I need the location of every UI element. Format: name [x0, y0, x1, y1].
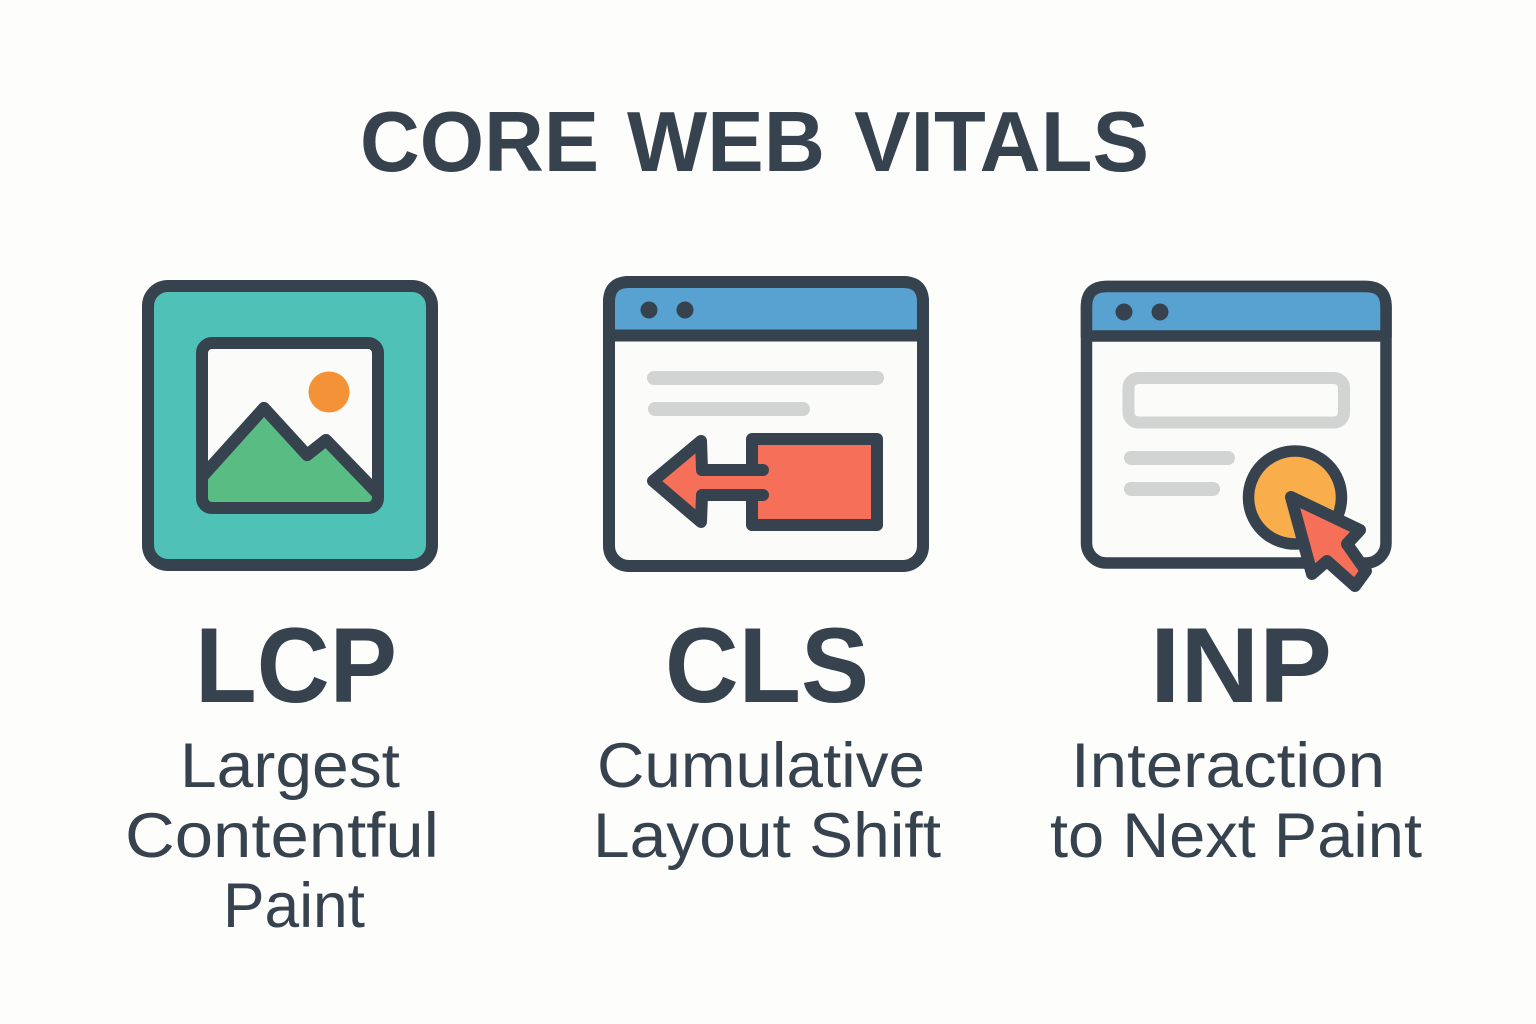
title: CORE — [360, 95, 599, 190]
description: LCP: Contentful — [125, 801, 439, 871]
icon: CLS layout shift — [609, 282, 923, 566]
icon: INP interaction — [1086, 286, 1386, 586]
description: INP — [1050, 731, 1423, 871]
heading: LCP: LCP — [195, 605, 397, 725]
description: INP: to Next Paint — [1050, 801, 1423, 871]
description: CLS: Layout Shift — [593, 801, 942, 871]
description: LCP: Largest — [180, 731, 401, 801]
description: INP: Interaction — [1071, 731, 1385, 801]
title: VITALS — [854, 95, 1149, 190]
title: WEB — [627, 95, 825, 190]
description: CLS — [593, 731, 942, 871]
heading: INP: INP — [1150, 605, 1332, 725]
description: LCP — [125, 731, 439, 941]
heading: CLS: CLS — [665, 605, 869, 725]
icon: LCP image — [148, 286, 432, 565]
title — [360, 95, 1149, 190]
description: CLS: Cumulative — [597, 731, 925, 801]
description: LCP: Paint — [223, 871, 365, 941]
